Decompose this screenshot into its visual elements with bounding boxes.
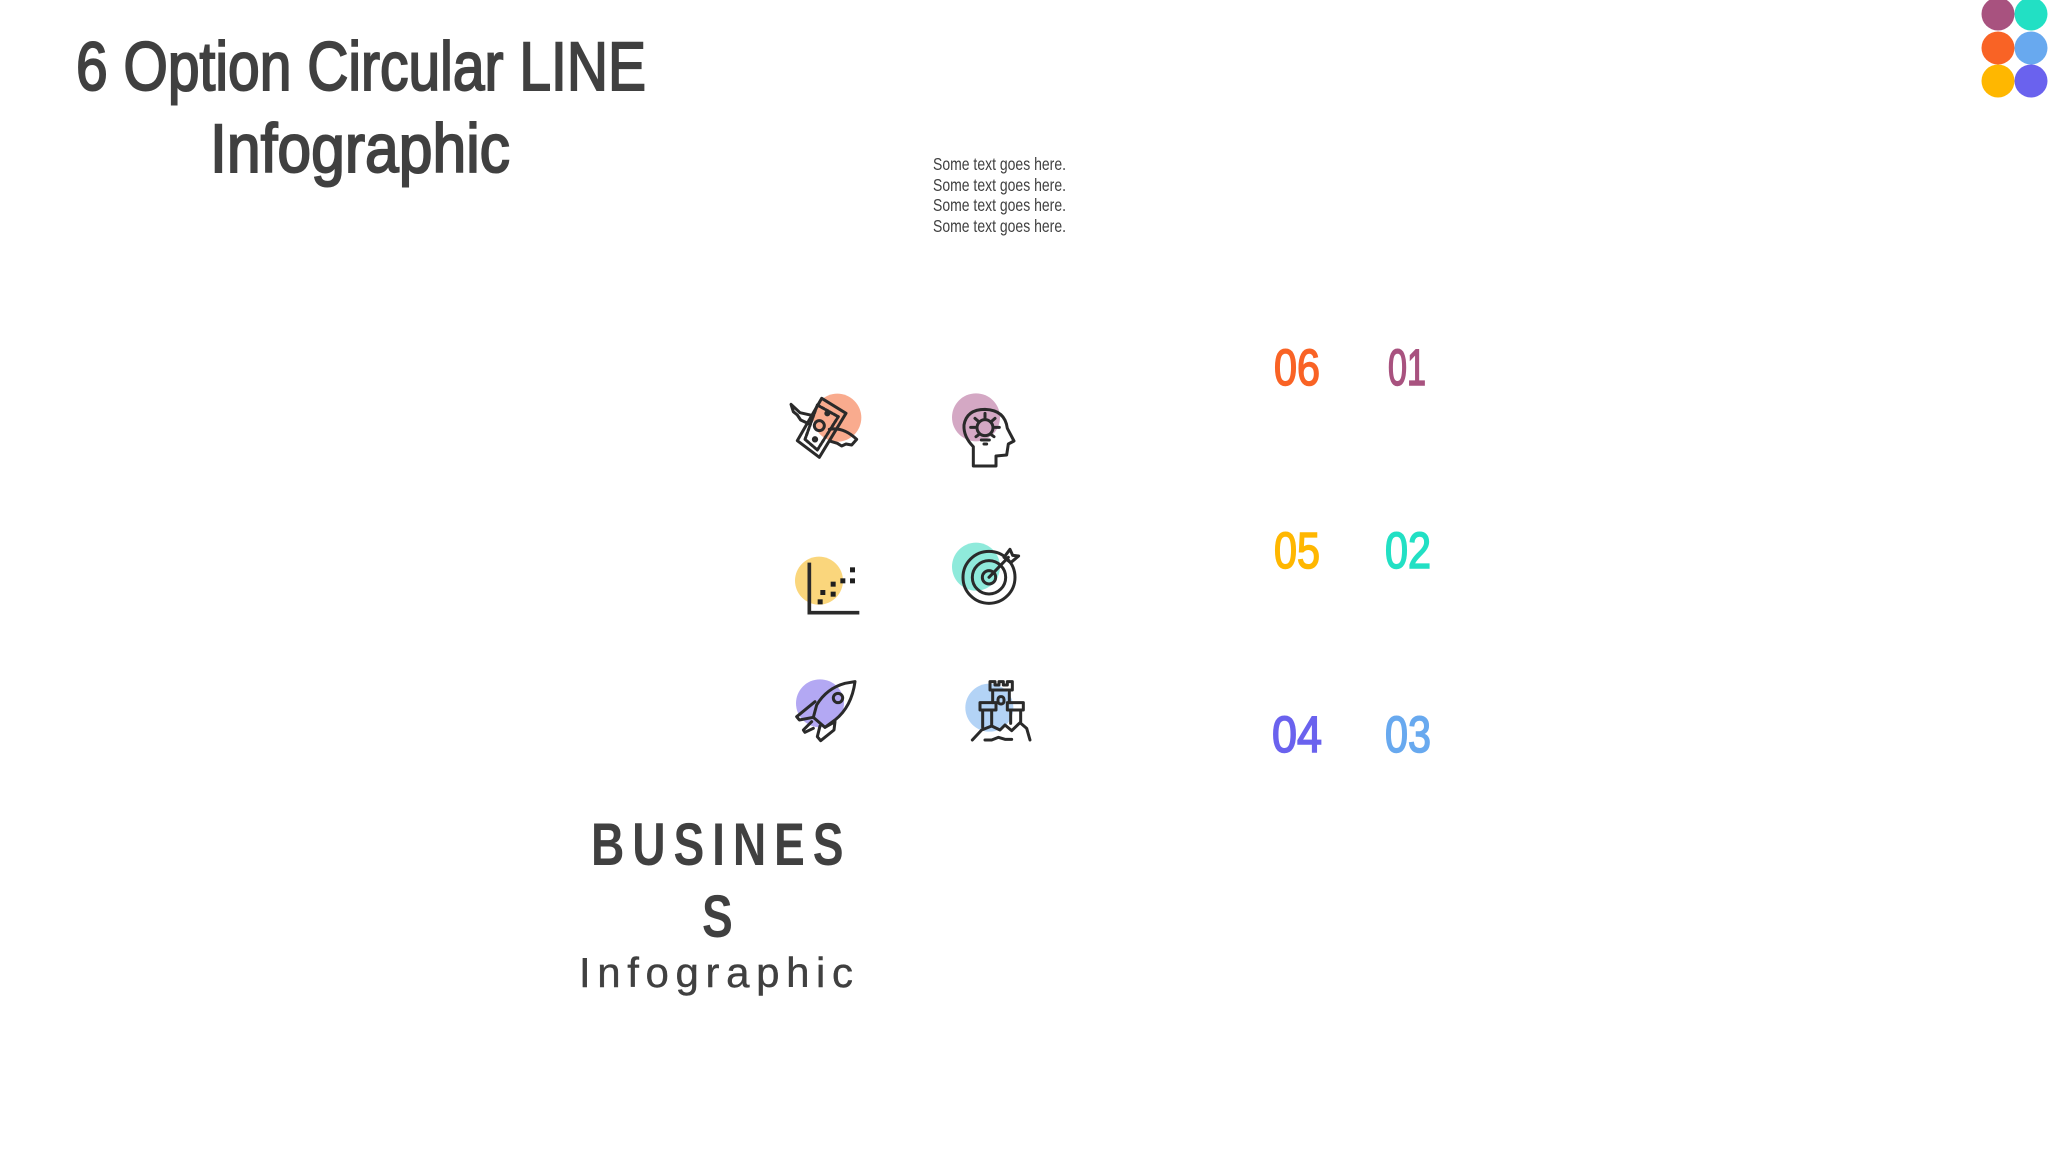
business heading xyxy=(591,812,844,950)
icon: scatter chart xyxy=(795,557,859,613)
icon: flying money xyxy=(791,394,861,457)
icon: head with light bulb xyxy=(952,393,1014,466)
title: 6 Option Circular LINE xyxy=(76,28,646,105)
text block: Some text goes here. xyxy=(933,175,1066,195)
number 03: 03 xyxy=(1385,706,1431,763)
number 05: 05 xyxy=(1274,522,1320,579)
text block: Some text goes here. xyxy=(933,154,1066,174)
infographic subtitle: Infographic xyxy=(579,949,853,996)
number 04: 04 xyxy=(1272,706,1322,763)
number 02: 02 xyxy=(1385,522,1431,579)
text block xyxy=(933,154,1066,236)
number 06: 06 xyxy=(1274,339,1320,396)
icon: castle on hill xyxy=(965,682,1030,740)
business heading: S xyxy=(702,884,733,950)
icon: target with arrow xyxy=(952,543,1019,603)
text block: Some text goes here. xyxy=(933,216,1066,236)
icon: rocket xyxy=(796,679,855,741)
number 01: 01 xyxy=(1388,339,1426,396)
text block: Some text goes here. xyxy=(933,195,1066,215)
title xyxy=(76,28,646,187)
business heading: BUSINES xyxy=(591,812,844,878)
title: Infographic xyxy=(210,110,510,187)
colour palette dots xyxy=(1982,0,2048,98)
